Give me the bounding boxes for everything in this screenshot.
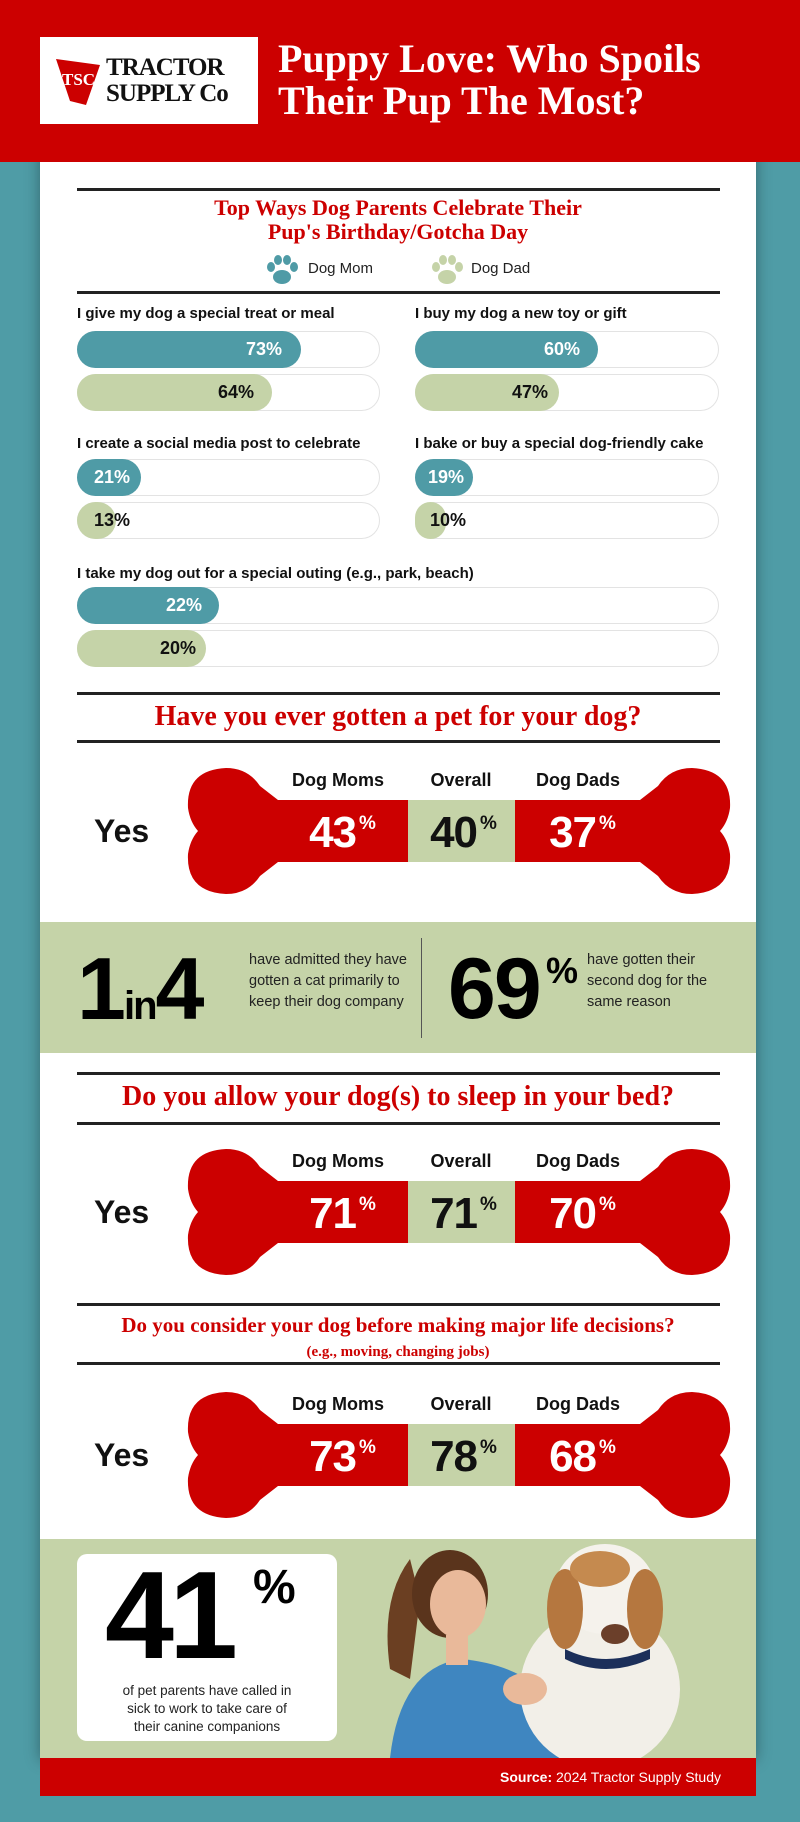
bars: special treat: 73% bbox=[246, 339, 282, 359]
stat card 41%: of pet parents have called in bbox=[123, 1683, 291, 1698]
bone 2: Overall bbox=[430, 1151, 492, 1171]
bars: cake: 19% bbox=[428, 467, 464, 487]
bars: social bbox=[77, 435, 380, 539]
bars: social: 13% bbox=[94, 510, 130, 530]
bone 3: 73% bbox=[309, 1432, 375, 1481]
bone 1 bbox=[94, 768, 730, 894]
bars: outing: 20% bbox=[160, 638, 196, 658]
question 3: (e.g., moving, changing jobs) bbox=[307, 1344, 489, 1360]
bars: cake: 10% bbox=[430, 510, 466, 530]
bars: outing: 22% bbox=[166, 595, 202, 615]
logo bbox=[40, 37, 258, 124]
bone 1: Overall bbox=[430, 770, 492, 790]
logo: TSC bbox=[62, 70, 95, 89]
bottom green band bbox=[40, 1539, 756, 1758]
stat 1 in 4 bbox=[77, 939, 407, 1038]
bone 1: Dog Moms bbox=[292, 770, 384, 790]
question 1: Have you ever gotten a pet for your dog? bbox=[155, 701, 641, 732]
stat 1 in 4: 1in4 bbox=[77, 939, 202, 1038]
question 2: Do you allow your dog(s) to sleep in your bed? bbox=[122, 1081, 674, 1112]
bars: special treat bbox=[77, 305, 380, 411]
stat 69%: same reason bbox=[587, 994, 671, 1010]
bone 2: Dog Moms bbox=[292, 1151, 384, 1171]
stats band bbox=[40, 922, 756, 1053]
bars: outing: I take my dog out for a special outing (e.g., park, beach) bbox=[77, 565, 474, 582]
bars: toy bbox=[415, 305, 719, 411]
title: Their Pup The Most? bbox=[278, 78, 644, 123]
bars: cake: I bake or buy a special dog-friendly cake bbox=[415, 435, 703, 452]
stat 69%: have gotten their bbox=[587, 952, 695, 968]
bars: social: 21% bbox=[94, 467, 130, 487]
stat 1 in 4: have admitted they have bbox=[249, 952, 407, 968]
question 3: Do you consider your dog before making major life decisions? bbox=[121, 1313, 675, 1337]
bars: toy: 60% bbox=[544, 339, 580, 359]
bars: special treat: I give my dog a special treat or meal bbox=[77, 305, 335, 322]
bars: toy: 47% bbox=[512, 382, 548, 402]
chart title: Top Ways Dog Parents Celebrate Their bbox=[214, 195, 582, 220]
bone 2: Yes bbox=[94, 1194, 149, 1230]
stat 69%: % bbox=[546, 950, 578, 991]
chart title: Pup's Birthday/Gotcha Day bbox=[268, 219, 528, 244]
header bbox=[0, 0, 800, 162]
bars: special treat: 64% bbox=[218, 382, 254, 402]
title bbox=[278, 36, 701, 123]
title: Puppy Love: Who Spoils bbox=[278, 36, 701, 81]
stat 69%: second dog for the bbox=[587, 973, 707, 989]
stat 1 in 4: keep their dog company bbox=[249, 994, 404, 1010]
bone 3 bbox=[94, 1392, 730, 1518]
bone 3: 78% bbox=[430, 1432, 496, 1481]
bars: toy: I buy my dog a new toy or gift bbox=[415, 305, 627, 322]
bone 2: Dog Dads bbox=[536, 1151, 620, 1171]
bone 3: Dog Dads bbox=[536, 1394, 620, 1414]
photo: vet and dog bbox=[388, 1544, 680, 1758]
stat card 41%: % bbox=[253, 1561, 296, 1614]
stat card 41%: 41 bbox=[105, 1547, 233, 1685]
bone 2 bbox=[94, 1149, 730, 1275]
legend: Dog Mom bbox=[308, 260, 373, 277]
bone 1: Yes bbox=[94, 813, 149, 849]
logo: SUPPLY Co bbox=[106, 80, 228, 107]
bone 3: Yes bbox=[94, 1437, 149, 1473]
stat card 41%: their canine companions bbox=[134, 1719, 280, 1734]
stat 69% bbox=[448, 941, 707, 1037]
bone 3: 68% bbox=[549, 1432, 615, 1481]
source bar bbox=[40, 1758, 756, 1796]
legend: Dog Dad bbox=[471, 260, 530, 277]
bone 1: Dog Dads bbox=[536, 770, 620, 790]
bone 2: 70% bbox=[549, 1189, 615, 1238]
stat 1 in 4: gotten a cat primarily to bbox=[249, 973, 400, 989]
legend bbox=[267, 255, 530, 284]
bone 1: 43% bbox=[309, 808, 375, 857]
bars: cake bbox=[415, 435, 719, 539]
question 3 bbox=[121, 1313, 675, 1360]
bone 1: 37% bbox=[549, 808, 615, 857]
bars: outing bbox=[77, 565, 719, 667]
bone 3: Overall bbox=[430, 1394, 492, 1414]
source bar: Source: 2024 Tractor Supply Study bbox=[500, 1769, 721, 1785]
bars: social: I create a social media post to celebrate bbox=[77, 435, 360, 452]
stat card 41% bbox=[77, 1554, 337, 1741]
bone 3: Dog Moms bbox=[292, 1394, 384, 1414]
bone 2: 71% bbox=[309, 1189, 375, 1238]
white panel bbox=[40, 150, 756, 1760]
stat 69%: 69 bbox=[448, 941, 540, 1037]
logo: TRACTOR bbox=[106, 54, 224, 81]
stat card 41%: sick to work to take care of bbox=[127, 1701, 287, 1716]
bone 2: 71% bbox=[430, 1189, 496, 1238]
chart title bbox=[214, 195, 582, 244]
bone 1: 40% bbox=[430, 808, 496, 857]
